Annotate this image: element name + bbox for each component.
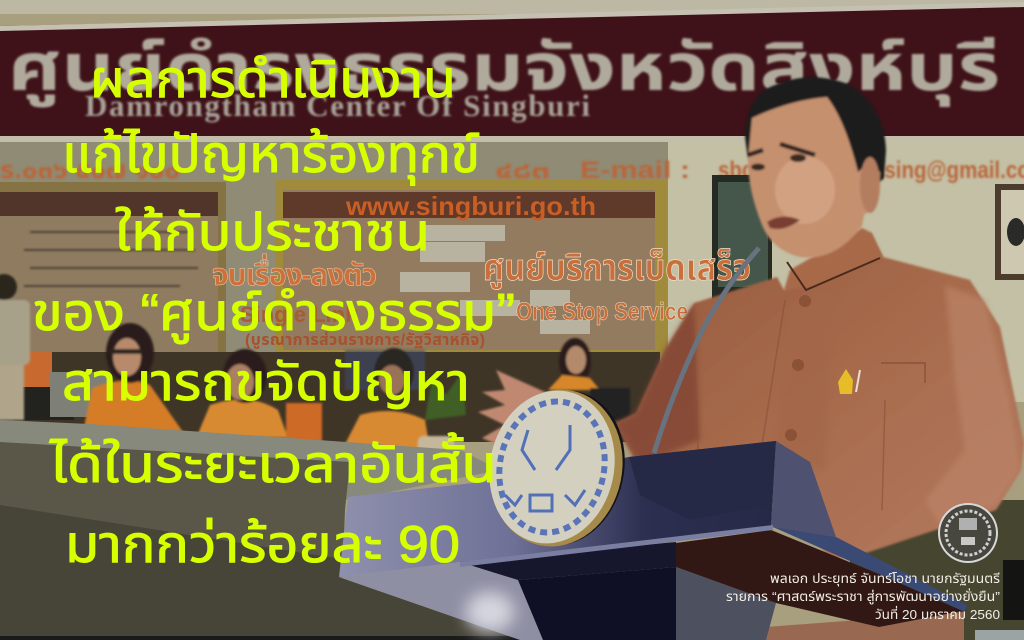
photo background: service centre: 4	[590, 366, 607, 399]
collar	[784, 228, 883, 290]
contact strip: E-mail :	[580, 157, 690, 184]
staff members	[83, 323, 630, 460]
right ground	[850, 500, 1024, 640]
sign board	[0, 2, 1024, 142]
buttons	[785, 295, 811, 441]
headline text: แก้ไขปัญหาร้องทุกข์	[62, 126, 480, 186]
one stop service signage: ศูนย์บริการเบ็ดเสร็จ	[483, 247, 751, 289]
headline text: ของ “ศูนย์ดำรงธรรม”	[32, 284, 515, 344]
presenter figure	[478, 77, 1024, 560]
sign board: ศูนย์ดำรงธรรมจังหวัดสิงห์บุรี	[8, 30, 1000, 107]
contact strip: ร.๐๓๖ ๕๐๗ ๑๐๐	[0, 157, 180, 184]
headline text: สามารถขจัดปัญหา	[62, 354, 470, 412]
standing person	[0, 274, 30, 420]
emblem on lectern	[475, 377, 639, 559]
head and hair	[745, 77, 886, 258]
caption	[726, 571, 1000, 622]
centre poster	[212, 180, 667, 355]
microphone	[654, 248, 759, 453]
caption: รายการ “ศาสตร์พระราชา สู่การพัฒนาอย่างยั่งยืน”	[726, 588, 1000, 604]
yellow pin	[838, 369, 853, 394]
caption: วันที่ 20 มกราคม 2560	[875, 605, 1000, 622]
centre poster: จบเรื่อง-ลงตัว	[212, 253, 377, 292]
centre poster: (บูรณาการส่วนราชการ/รัฐวิสาหกิจ)	[245, 331, 485, 350]
dark board and frames	[712, 175, 772, 305]
left poster	[0, 182, 226, 360]
headline text: ให้กับประชาชน	[115, 204, 430, 262]
headline text	[32, 51, 515, 574]
contact strip	[0, 157, 1024, 184]
wall below sign	[0, 142, 1024, 402]
headline text: ได้ในระยะเวลาอันสั้น	[49, 432, 497, 494]
headline text: มากกว่าร้อยละ 90	[65, 516, 460, 574]
small government seal	[938, 503, 998, 563]
lectern	[339, 441, 967, 640]
headline text: ผลการดำเนินงาน	[90, 51, 456, 109]
pocket	[881, 363, 925, 383]
centre poster: www.singburi.go.th	[345, 191, 596, 221]
centre poster: Single Link	[240, 302, 358, 327]
gesturing hand	[478, 370, 575, 448]
contact strip: ๔๘๓	[495, 157, 550, 184]
photo background: service centre: One Stop Service	[516, 298, 688, 326]
jacket	[615, 233, 1024, 560]
caption: พลเอก ประยุทธ์ จันทร์โอชา นายกรัฐมนตรี	[770, 571, 1000, 586]
sign board: Damrongtham Center Of Singburi	[85, 88, 590, 123]
counter top and stone front	[0, 420, 500, 500]
counter area, dark interior	[0, 352, 660, 442]
sleeve shading	[925, 285, 1020, 525]
